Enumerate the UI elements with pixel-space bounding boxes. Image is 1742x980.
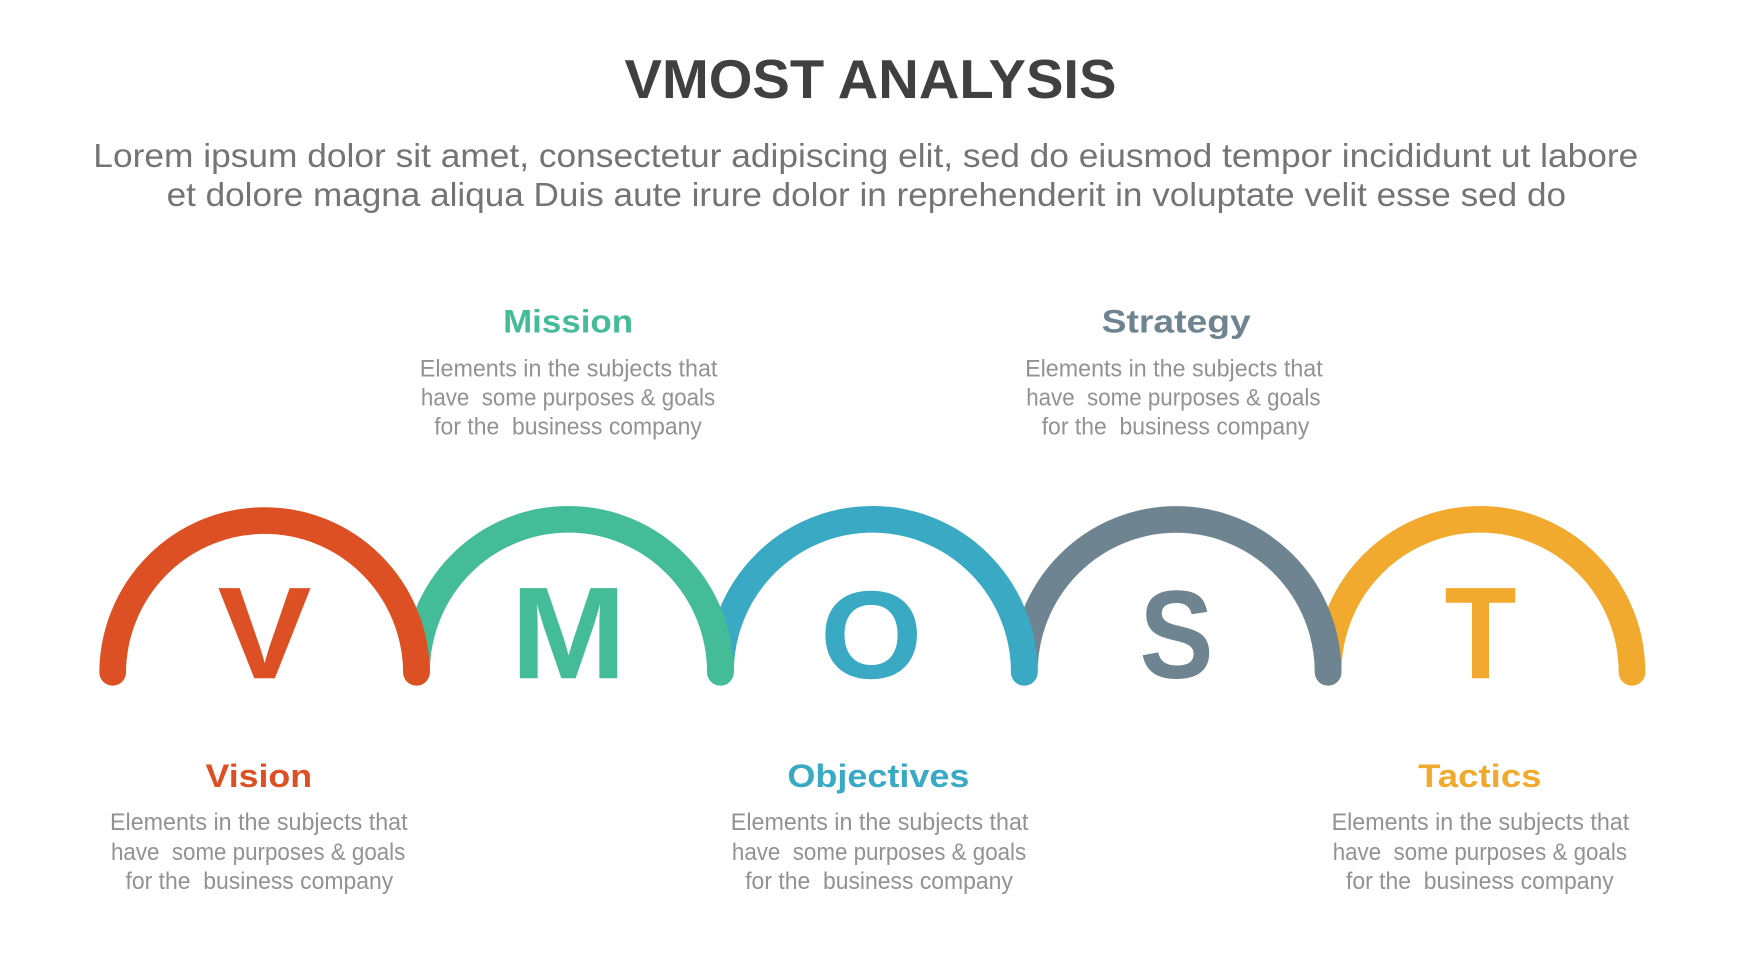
description: objectives: for the business company	[745, 868, 1013, 895]
letter S: S	[1140, 566, 1214, 705]
heading: strategy: Strategy	[1102, 304, 1251, 340]
arc: vision	[113, 521, 417, 672]
description: strategy	[1025, 355, 1323, 440]
description: vision	[110, 809, 408, 895]
arc: objectives	[720, 519, 1024, 672]
letter V: V	[218, 559, 312, 706]
intro paragraph: et dolore magna aliqua Duis aute irure dolor in reprehenderit in voluptate velit esse sed do	[167, 176, 1566, 213]
block: vision	[110, 758, 408, 895]
block: tactics	[1332, 758, 1630, 895]
description: tactics	[1332, 809, 1630, 895]
title: VMOST ANALYSIS	[624, 48, 1116, 110]
block: mission	[420, 304, 718, 440]
description: mission: for the business company	[434, 413, 702, 440]
heading: tactics: Tactics	[1418, 758, 1542, 794]
arc: strategy	[1024, 519, 1328, 672]
description: vision: Elements in the subjects that	[110, 809, 408, 836]
description: vision: have some purposes & goals	[111, 839, 405, 866]
heading: objectives: Objectives	[787, 758, 969, 794]
description: mission: Elements in the subjects that	[420, 355, 718, 382]
description: strategy: have some purposes & goals	[1026, 385, 1320, 412]
letter T: T	[1444, 559, 1516, 706]
description: objectives	[731, 809, 1029, 895]
letter O: O	[820, 566, 922, 705]
description: strategy: Elements in the subjects that	[1025, 355, 1323, 382]
description: tactics: have some purposes & goals	[1333, 839, 1627, 866]
description: objectives: Elements in the subjects that	[731, 809, 1029, 836]
description: tactics: Elements in the subjects that	[1332, 809, 1630, 836]
description: tactics: for the business company	[1346, 868, 1614, 895]
description: objectives: have some purposes & goals	[732, 839, 1026, 866]
description: vision: for the business company	[126, 868, 393, 895]
intro paragraph	[93, 137, 1638, 213]
block: strategy	[1025, 304, 1323, 440]
arc: mission	[416, 519, 720, 672]
letter M: M	[510, 559, 626, 706]
description: strategy: for the business company	[1042, 413, 1309, 440]
description: mission	[420, 355, 718, 440]
heading: vision: Vision	[206, 758, 312, 794]
description: mission: have some purposes & goals	[421, 385, 715, 412]
intro paragraph: Lorem ipsum dolor sit amet, consectetur adipiscing elit, sed do eiusmod tempor incididunt ut labore	[93, 137, 1638, 174]
heading: mission: Mission	[503, 304, 633, 340]
arc: tactics	[1328, 519, 1632, 672]
block: objectives	[731, 758, 1029, 895]
